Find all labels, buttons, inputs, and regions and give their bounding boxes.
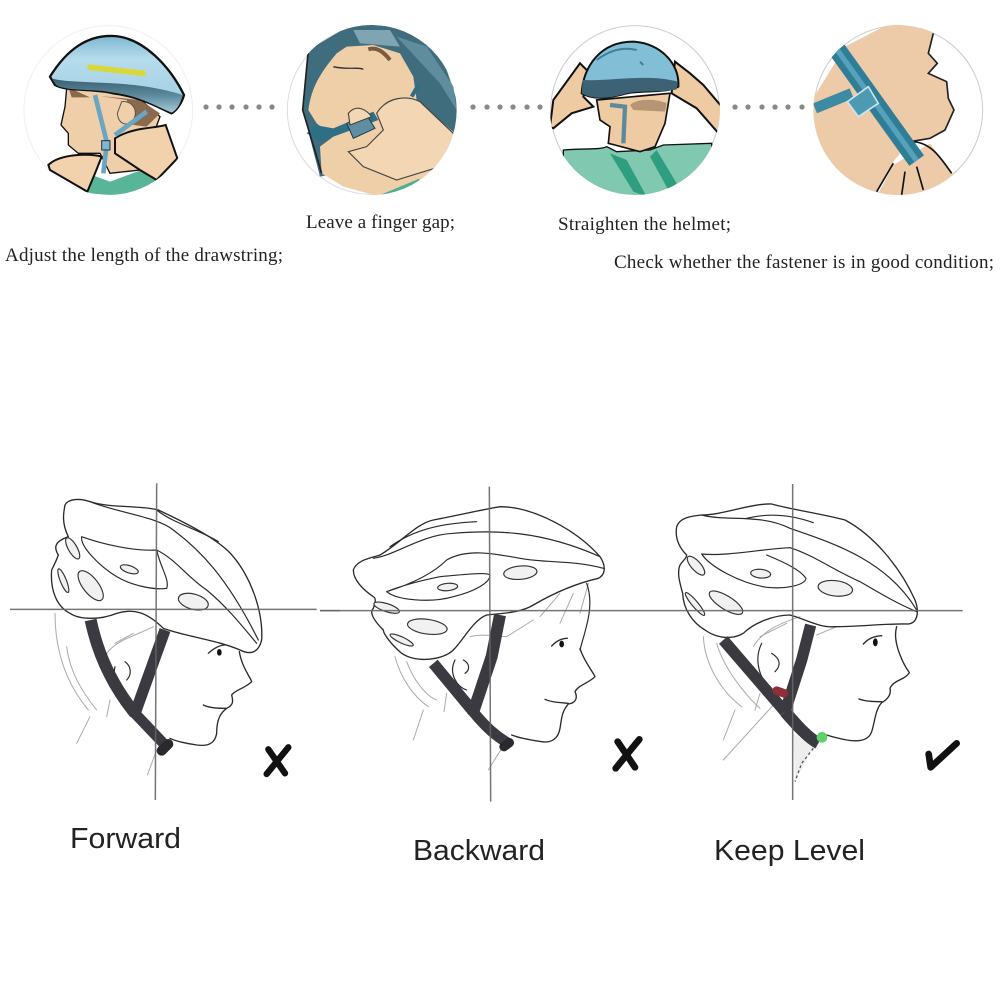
icon: cross mark	[616, 739, 639, 768]
diagram: helmet kept level	[660, 484, 963, 800]
icon: check mark	[929, 743, 957, 767]
icon: boy adjusting the drawstring	[24, 26, 193, 197]
icon: boy straightening the helmet	[550, 26, 722, 198]
dotted connector 1	[203, 104, 275, 110]
caption: adjust the drawstring: Adjust the length of the drawstring;	[5, 245, 283, 266]
icon: fingers checking the gap under the chin	[287, 23, 460, 197]
caption: straighten the helmet: Straighten the helmet;	[558, 214, 731, 235]
icon: checking the fastener	[810, 23, 983, 197]
diagram: helmet tilted forward	[10, 483, 340, 800]
label: keep level: Keep Level	[714, 835, 865, 867]
caption: leave a finger gap: Leave a finger gap;	[306, 212, 455, 233]
dotted connector 2	[470, 104, 543, 110]
icon: cross mark	[267, 747, 288, 774]
label: forward: Forward	[70, 823, 181, 855]
label: backward: Backward	[413, 835, 545, 867]
dotted connector 3	[732, 104, 805, 110]
diagram: helmet tilted backward	[320, 487, 660, 802]
caption: check the fastener: Check whether the fastener is in good condition;	[614, 252, 994, 273]
